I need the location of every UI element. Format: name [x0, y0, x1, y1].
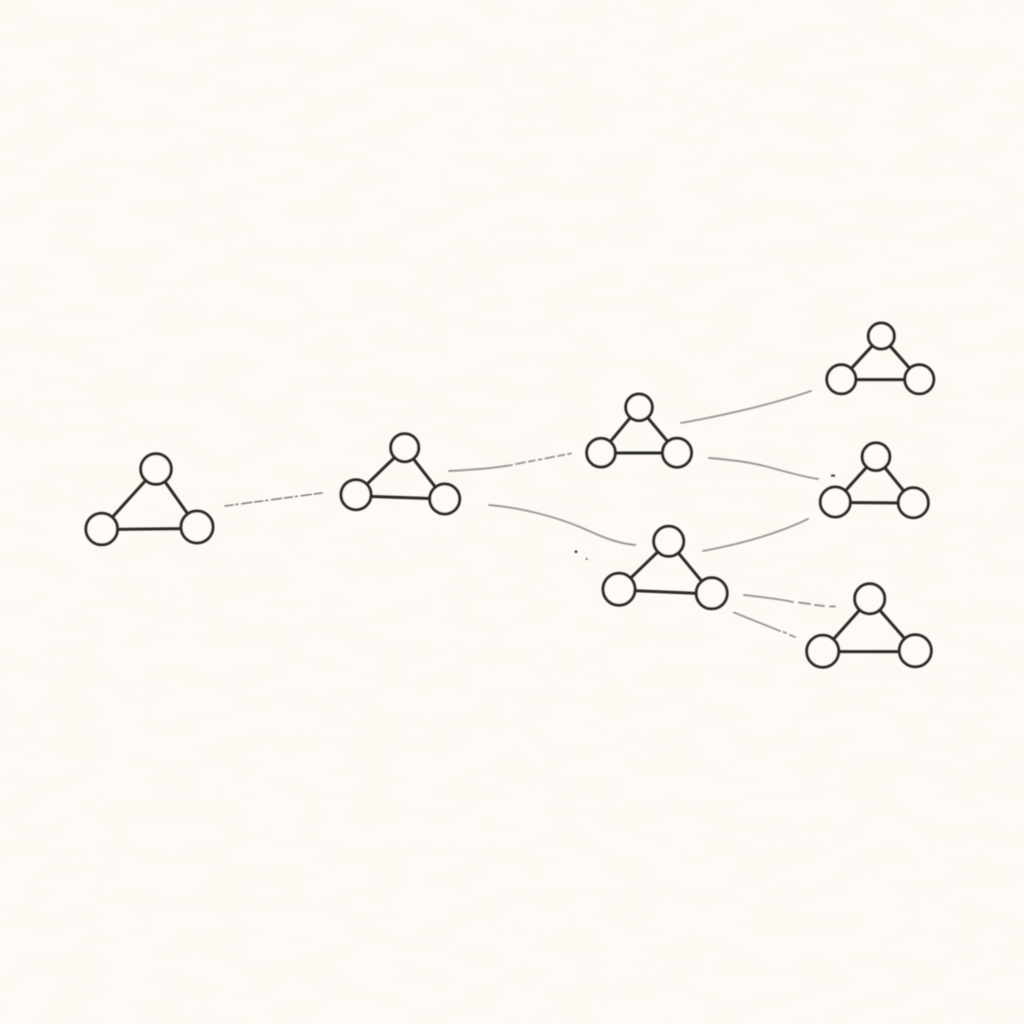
triangle node: stage 1	[86, 454, 213, 545]
triangle node: stage 2	[341, 434, 460, 514]
connector: lower stage 3 to second stage 4	[703, 519, 808, 551]
stray ink mark	[831, 474, 835, 477]
connector: stage 1 to stage 2	[225, 493, 322, 506]
triangle node: second stage 4	[820, 443, 928, 518]
triangle node: top stage 4	[827, 323, 934, 394]
connector: upper stage 3 to top stage 4	[681, 391, 811, 423]
triangle node: upper stage 3	[587, 394, 692, 467]
triangle node: lower stage 3	[603, 526, 727, 609]
triangle node: bottom stage 4	[807, 584, 931, 667]
connector: upper stage 3 to second stage 4	[709, 458, 818, 479]
connector: stage 2 to upper stage 3	[449, 453, 574, 471]
stray ink dots	[575, 550, 588, 560]
connector: lower stage 3 to bottom stage 4	[734, 612, 795, 637]
connector: lower stage 3 to third stage 4	[744, 595, 835, 606]
connector: stage 2 to lower stage 3	[489, 505, 635, 545]
network drawing	[86, 323, 934, 667]
